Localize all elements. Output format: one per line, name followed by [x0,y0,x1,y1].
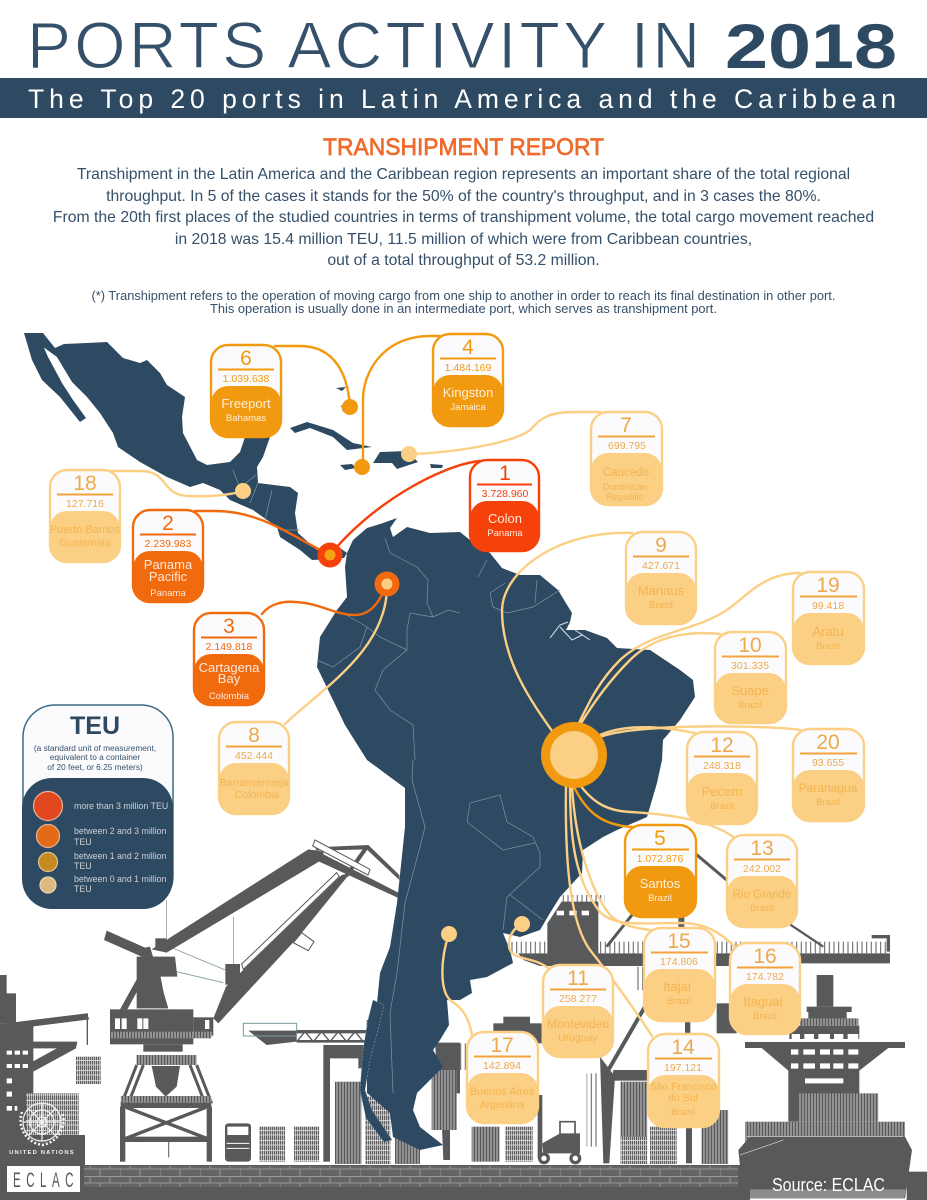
port card 9 Manaus: 9 [655,534,667,557]
Hispaniola [373,451,418,469]
port card 4 Kingston: 4 [462,336,474,359]
ECLAC logo: ECLAC [13,1168,79,1192]
intro text block: From the 20th first places of the studied countries in terms of transhipment volume, the total cargo movement reached [53,209,874,226]
port card 10 Suape: 10 [738,634,762,657]
intro text block: in 2018 was 15.4 million TEU, 11.5 million of which were from Caribbean countries, [175,231,752,248]
port card 1 Colon: 3.728.960 [482,488,529,500]
port card 3 Cartagena Bay: 3 [223,615,235,638]
legend definition: equivalent to a container [50,752,140,762]
legend: 0 to 1 million [40,874,167,894]
port card 6 Freeport: Bahamas [226,413,266,424]
port card 9 Manaus: Brazil [649,600,673,611]
port card 2 Panama Pacific [133,510,203,602]
port card 8 Barranvermeja: Colombia [235,789,279,801]
legend definition: (a standard unit of measurement, [34,743,156,753]
port card 2 Panama Pacific: 2.239.983 [145,538,192,550]
quay gantry and container stacks [243,1020,460,1164]
Bahamas [336,387,346,412]
port card 14 Sao Francisco do Sul: 197.121 [664,1062,702,1074]
port card 13 Rio Grande: 13 [750,837,774,860]
port card 3 Cartagena Bay: 2.149.818 [206,641,253,653]
dock crane [104,840,399,1162]
port card 16 Itaguai [730,943,800,1034]
port card 12 Pecem: Brazil [710,801,734,812]
port card 9 Manaus [626,532,696,624]
port card 20 Paranagua [793,729,864,821]
port card 4 Kingston [433,334,503,426]
UN emblem [9,1103,75,1156]
port card 18 Puerto Barrios [50,470,121,562]
connector lines [110,336,800,1036]
port card 4 Kingston: Jamaica [450,402,486,413]
legend: 2 to 3 million: TEU [74,837,92,847]
port card 15 Itajai: Itajai [663,979,691,994]
port card 2 Panama Pacific: Panama [144,557,193,572]
legend: 2 to 3 million: between 2 and 3 million [74,826,167,836]
port card 10 Suape [715,632,786,723]
port card 14 Sao Francisco do Sul [648,1034,719,1127]
UN emblem: UNITED NATIONS [9,1150,75,1156]
intro text block: out of a total throughput of 53.2 million. [327,252,600,269]
legend definition: of 20 feet, or 6.25 meters) [47,762,143,772]
port card 19 Aratu: Brazil [816,641,840,652]
port card 8 Barranvermeja [219,722,289,814]
country borders [233,470,560,1093]
port card 17 Buenos Aires: 142.894 [483,1060,521,1072]
port card 7 Caucedo: Dominican [603,482,647,493]
port card 11 Montevideo [543,965,613,1057]
port card 1 Colon: Colon [488,511,522,526]
port card 18 Puerto Barrios: Puerto Barrios [50,524,121,536]
port card 20 Paranagua: Paranagua [799,781,858,795]
port card 16 Itaguai: Brazil [753,1011,777,1022]
legend: 1 to 2 million [38,851,167,872]
port card 4 Kingston: 1.484.169 [445,362,492,374]
transhipment footnote: This operation is usually done in an intermediate port, which serves as transhipment port. [210,301,717,316]
port scene right: gantry, containers, ship [460,853,927,1200]
port card 8 Barranvermeja: Barranvermeja [220,777,289,789]
port card 18 Puerto Barrios: 127.716 [66,498,104,510]
port card 8 Barranvermeja: 452.444 [235,750,273,762]
port card 12 Pecem: 248.318 [703,760,741,772]
port card 7 Caucedo: Caucedo [603,467,649,479]
legend: 0 to 1 million: between 0 and 1 million [74,874,167,884]
port card 3 Cartagena Bay: Colombia [209,691,250,702]
port card 15 Itajai: 174.806 [660,956,698,968]
port card 1 Colon: 1 [499,462,511,485]
port card 17 Buenos Aires: Buenos Aires [470,1086,535,1098]
port card 10 Suape: Brazil [738,700,762,711]
port card 19 Aratu [793,572,864,664]
port card 5 Santos: 1.072.876 [637,853,684,865]
port card 5 Santos: Santos [640,876,681,891]
title: 2018 [725,12,897,82]
map of Latin America and the Caribbean [24,333,695,1150]
port card 11 Montevideo: Montevideo [547,1017,609,1031]
port card 6 Freeport: Freeport [221,396,271,411]
port card 2 Panama Pacific: Panama [150,588,186,599]
port card 17 Buenos Aires [467,1032,538,1123]
port card 20 Paranagua: 20 [816,731,840,754]
South America [317,518,695,1150]
intro text block [53,166,874,269]
transhipment footnote [92,288,835,316]
port card 15 Itajai: Brazil [667,996,691,1007]
ground right of ship [907,1172,927,1200]
subtitle bar: The Top 20 ports in Latin America and the Caribbean [28,84,896,114]
port card 3 Cartagena Bay: Bay [218,671,241,686]
port card 16 Itaguai: Itaguai [743,994,783,1009]
port card 15 Itajai: 15 [667,930,691,953]
port card 2 Panama Pacific: Pacific [149,569,188,584]
port card 1 Colon [470,460,539,551]
container ship [738,975,912,1198]
port card 10 Suape: 301.335 [731,660,769,672]
intro text block: Transhipment in the Latin America and the Caribbean region represents an important share of the total regional [77,166,850,183]
legend: more than 3 million: more than 3 million TEU [74,801,168,811]
port card 12 Pecem [687,732,757,824]
port card 1 Colon: Panama [487,528,523,539]
port card 5 Santos: Brazil [648,893,672,904]
port card 16 Itaguai: 16 [753,945,777,968]
port card 14 Sao Francisco do Sul: 14 [671,1036,695,1059]
port card 17 Buenos Aires: Argentina [480,1099,525,1111]
Cuba [290,422,372,450]
legend: more than 3 million [34,792,168,820]
port card 18 Puerto Barrios: Guatemala [59,537,111,549]
port card 19 Aratu: 19 [816,574,840,597]
port card 7 Caucedo: Republic [607,492,644,503]
port card 8 Barranvermeja: 8 [248,724,260,747]
intro text block: throughput. In 5 of the cases it stands for the 50% of the country's throughput, and in 3 cases the 80%. [106,188,821,205]
Baja California [24,333,86,422]
port card 13 Rio Grande: Brazil [750,903,774,914]
report heading: TRANSHIPMENT REPORT [323,134,604,161]
port card 16 Itaguai: 174.782 [746,971,784,983]
port card 11 Montevideo: 258.277 [559,993,597,1005]
port card 6 Freeport: 6 [240,347,252,370]
port card 6 Freeport [211,345,281,437]
legend: 0 to 1 million: TEU [74,884,92,894]
port card 15 Itajai [644,928,715,1021]
transhipment footnote: (*) Transhipment refers to the operation of moving cargo from one ship to another in order to reach its final destination in other port. [92,288,835,303]
port card 7 Caucedo [591,412,662,505]
port card 12 Pecem: 12 [710,734,734,757]
port card 19 Aratu: Aratu [812,624,844,639]
port card 5 Santos: 5 [654,827,666,850]
Amazon delta detail [550,622,590,640]
ship superstructure left [0,975,101,1200]
port card 6 Freeport: 1.039.638 [223,373,270,385]
quay ground [84,1165,750,1200]
port scene left: crane, ship, vehicles [0,840,460,1200]
ship-to-shore gantry [460,853,890,1163]
port card 18 Puerto Barrios: 18 [73,472,97,495]
port card 12 Pecem: Pecem [702,784,742,799]
forklift [538,1095,581,1164]
Puerto Rico [430,464,443,468]
port location nodes [235,399,607,942]
containers and trucks [472,1003,737,1164]
port card 13 Rio Grande: 242.002 [743,863,781,875]
legend: 1 to 2 million: TEU [74,861,92,871]
Jamaica [340,464,356,470]
port card 7 Caucedo: 699.795 [608,440,646,452]
legend heading: TEU [70,712,120,740]
legend: 2 to 3 million [36,824,167,848]
port card 3 Cartagena Bay [194,613,264,705]
legend: 1 to 2 million: between 1 and 2 million [74,851,167,861]
southern Chile islands [360,1000,392,1142]
TEU legend panel [22,705,173,909]
port card 20 Paranagua: 93.655 [812,757,844,769]
port card 19 Aratu: 99.418 [812,600,844,612]
port card 14 Sao Francisco do Sul: Brazil [671,1107,695,1118]
Mexico and Central America [24,333,347,560]
port card 20 Paranagua: Brazil [816,797,840,808]
title: PORTS ACTIVITY IN [27,8,700,82]
port card 11 Montevideo: 11 [567,967,589,990]
source credit: Source: ECLAC [772,1175,885,1195]
port card 13 Rio Grande [727,835,797,927]
port card 7 Caucedo: 7 [620,414,632,437]
port card 9 Manaus: 427.671 [642,560,680,572]
port card 17 Buenos Aires: 17 [490,1034,514,1057]
train and wagons [225,1123,319,1162]
port card 4 Kingston: Kingston [443,385,493,400]
port card 14 Sao Francisco do Sul: São Francisco [649,1081,717,1093]
legend definition [34,743,156,772]
port card 11 Montevideo: Uruguay [558,1032,599,1044]
port card 5 Santos [625,825,696,917]
port card 2 Panama Pacific: 2 [162,512,174,535]
port card 10 Suape: Suape [731,683,769,698]
port card 13 Rio Grande: Rio Grande [733,889,791,901]
port card 3 Cartagena Bay: Cartagena [199,660,260,675]
port card 14 Sao Francisco do Sul: do Sul [668,1092,698,1104]
port card 9 Manaus: Manaus [638,583,685,598]
